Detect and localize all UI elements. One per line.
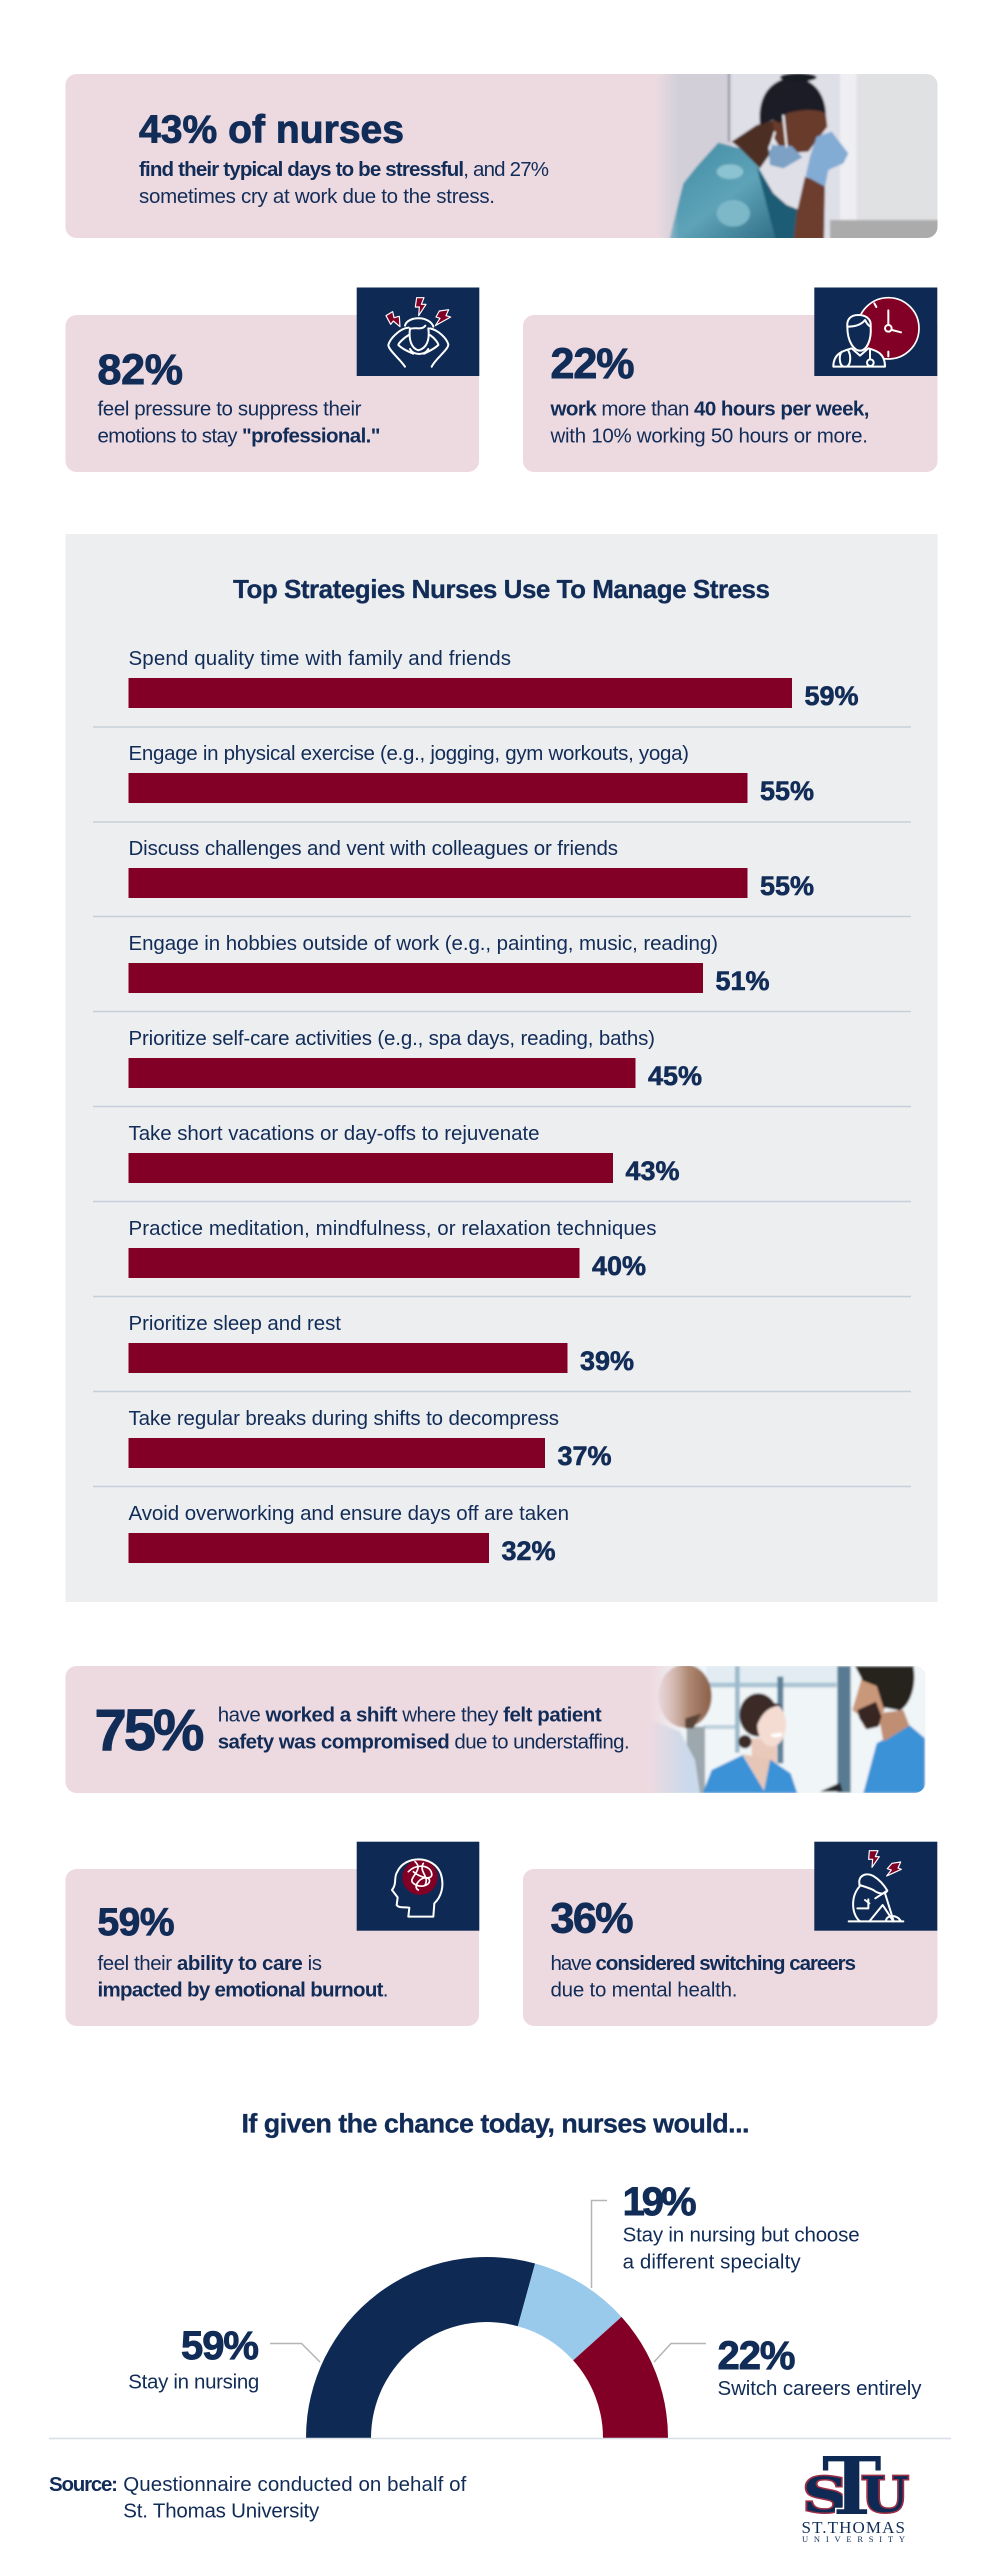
label: 59% stay in nursing: Stay in nursing — [128, 2371, 259, 2394]
icon: stressed person holding head — [357, 288, 479, 376]
icon: doctor and clock — [814, 288, 937, 376]
stat: 75%: 75% — [94, 1698, 204, 1763]
heading: 43% of nurses: 43% of nurses — [139, 108, 404, 152]
panel: 59% card — [66, 1842, 479, 2026]
bar row: physical exercise 55%: Engage in physical exercise (e.g., jogging, gym workouts, yoga) — [128, 742, 689, 765]
panel: 36% card — [523, 1842, 938, 2026]
bar row: breaks 37%: 37% — [558, 1441, 612, 1471]
label: 22% switch careers — [718, 2334, 922, 2400]
panel: 43% of nurses banner — [66, 70, 943, 243]
text: stress description: sometimes cry at work due to the stress. — [139, 185, 495, 208]
source note — [49, 2473, 467, 2523]
logo: St. Thomas University: T — [822, 2439, 882, 2533]
logo: St. Thomas University: U — [861, 2467, 909, 2524]
text: 75% description: have worked a shift where they felt patient — [218, 1704, 602, 1727]
bar row: vent with colleagues 55%: 55% — [760, 871, 814, 901]
logo: St. Thomas University — [802, 2439, 909, 2544]
leader lines — [270, 2200, 706, 2362]
label: 19% different specialty — [623, 2180, 860, 2273]
bar row: sleep 39%: 39% — [580, 1346, 634, 1376]
bar row: vent with colleagues 55% — [128, 837, 814, 901]
text: 22% description — [550, 398, 870, 448]
icon: head with tangled brain — [357, 1842, 479, 1931]
source note: Source: — [49, 2473, 118, 2496]
text: stress description: find their typical days to be stressful, and 27% — [139, 158, 549, 181]
bar row: meditation 40%: Practice meditation, mindfulness, or relaxation techniques — [128, 1217, 656, 1240]
bar row: days off 32%: 32% — [502, 1536, 556, 1566]
donut segment: switch careers — [573, 2317, 668, 2438]
text: 36% description: due to mental health. — [550, 1979, 738, 2002]
logo: St. Thomas University: UNIVERSITY — [802, 2534, 905, 2544]
text: 22% description: with 10% working 50 hours or more. — [550, 425, 868, 448]
bar row: self-care 45% — [128, 1027, 702, 1091]
bar row: hobbies 51%: 51% — [716, 966, 770, 996]
label: 19% different specialty: 19% — [623, 2180, 697, 2224]
bar row: vacations 43% — [128, 1122, 680, 1186]
chart: half donut of career intentions — [128, 2180, 922, 2438]
panel: 22% card — [523, 288, 938, 472]
text: 59% description — [98, 1952, 388, 2002]
donut segment: different specialty — [518, 2264, 622, 2360]
bar row: meditation 40% — [128, 1217, 656, 1281]
photo: stressed nurse leaning on wall — [658, 74, 938, 238]
logo: St. Thomas University: S — [802, 2468, 848, 2524]
panel: 82% card — [66, 288, 479, 472]
stat: 82%: 82% — [98, 346, 183, 394]
text: 75% description — [218, 1704, 630, 1753]
label: 59% stay in nursing — [128, 2324, 259, 2394]
bar row: family and friends 59%: 59% — [804, 681, 858, 711]
bar row: sleep 39% — [128, 1312, 634, 1376]
bar row: days off 32%: Avoid overworking and ensure days off are taken — [128, 1502, 569, 1525]
stat: 59%: 59% — [98, 1901, 174, 1944]
panel: top strategies — [66, 534, 938, 1602]
label: 59% stay in nursing: 59% — [181, 2324, 259, 2368]
logo: St. Thomas University: ST.THOMAS — [802, 2518, 905, 2537]
bar row: vacations 43%: Take short vacations or day-offs to rejuvenate — [128, 1122, 540, 1145]
photo: three nurses talking — [650, 1666, 926, 1793]
stat: 36%: 36% — [550, 1894, 634, 1942]
text: stress description — [139, 158, 549, 208]
text: 82% description: feel pressure to suppress their — [98, 398, 362, 421]
text: 82% description — [98, 398, 380, 448]
stat: 22%: 22% — [550, 340, 634, 388]
source note: Questionnaire conducted on behalf of — [123, 2473, 467, 2496]
bar row: family and friends 59%: Spend quality time with family and friends — [128, 647, 511, 670]
label: 22% switch careers: Switch careers entirely — [718, 2377, 922, 2400]
text: 82% description: emotions to stay "professional." — [98, 425, 380, 448]
bar row: physical exercise 55% — [128, 742, 814, 806]
bar row: self-care 45%: 45% — [648, 1061, 702, 1091]
bar row: self-care 45%: Prioritize self-care activities (e.g., spa days, reading, baths) — [128, 1027, 655, 1050]
text: 59% description: feel their ability to care is — [98, 1952, 322, 1975]
text: 22% description: work more than 40 hours per week, — [550, 398, 870, 421]
bar row: breaks 37% — [128, 1407, 612, 1471]
bar row: family and friends 59% — [128, 647, 858, 711]
source note: St. Thomas University — [123, 2500, 320, 2523]
bar row: vacations 43%: 43% — [626, 1156, 680, 1186]
heading: top strategies: Top Strategies Nurses Use To Manage Stress — [233, 574, 770, 604]
icon: person hunched over knees — [814, 1842, 937, 1931]
bar row: sleep 39%: Prioritize sleep and rest — [128, 1312, 341, 1335]
heading: if given the chance: If given the chance today, nurses would... — [242, 2109, 750, 2139]
label: 19% different specialty: a different specialty — [623, 2250, 801, 2273]
bar chart: strategies — [93, 647, 911, 1566]
text: 59% description: impacted by emotional burnout. — [98, 1979, 388, 2002]
bar row: vent with colleagues 55%: Discuss challenges and vent with colleagues or friends — [128, 837, 618, 860]
label: 22% switch careers: 22% — [718, 2334, 796, 2378]
donut segment: stay in nursing — [306, 2257, 535, 2438]
bar row: days off 32% — [128, 1502, 569, 1566]
bar row: physical exercise 55%: 55% — [760, 776, 814, 806]
bar row: hobbies 51% — [128, 932, 770, 996]
text: 36% description: have considered switching careers — [550, 1952, 856, 1975]
bar row: meditation 40%: 40% — [592, 1251, 646, 1281]
label: 19% different specialty: Stay in nursing but choose — [623, 2224, 860, 2247]
bar row: hobbies 51%: Engage in hobbies outside of work (e.g., painting, music, reading) — [128, 932, 718, 955]
panel: 75% banner — [66, 1666, 926, 1793]
text: 75% description: safety was compromised due to understaffing. — [218, 1730, 630, 1753]
bar row: breaks 37%: Take regular breaks during shifts to decompress — [128, 1407, 559, 1430]
text: 36% description — [550, 1952, 856, 2002]
